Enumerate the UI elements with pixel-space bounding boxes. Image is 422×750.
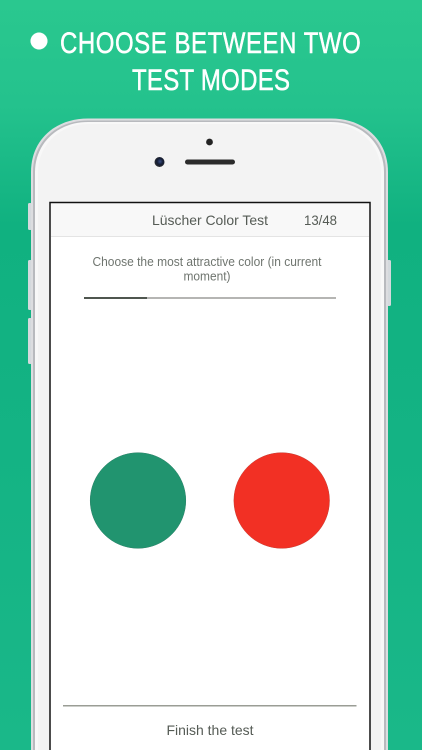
- heading: [31, 25, 361, 97]
- finish button: Finish the test: [166, 722, 254, 738]
- heading line 2: TEST MODES: [132, 62, 290, 97]
- progress bar: [84, 297, 336, 299]
- instruction text: moment): [184, 268, 230, 284]
- nav title: Lüscher Color Test: [152, 212, 268, 228]
- heading line 1: CHOOSE BETWEEN TWO: [60, 25, 361, 60]
- divider: [63, 705, 356, 706]
- bullet: [31, 33, 47, 49]
- red color choice: [234, 453, 330, 548]
- side buttons: [28, 203, 391, 364]
- screen: [50, 202, 370, 750]
- progress count: 13/48: [304, 213, 337, 228]
- navigation bar: [51, 204, 369, 236]
- front camera: [154, 157, 164, 167]
- phone: [28, 118, 391, 750]
- speaker: [185, 160, 235, 164]
- green color choice: [90, 453, 186, 548]
- instruction text: [92, 254, 322, 284]
- phone body: [31, 118, 388, 750]
- instruction text: Choose the most attractive color (in current: [92, 254, 322, 269]
- sensor: [206, 139, 213, 145]
